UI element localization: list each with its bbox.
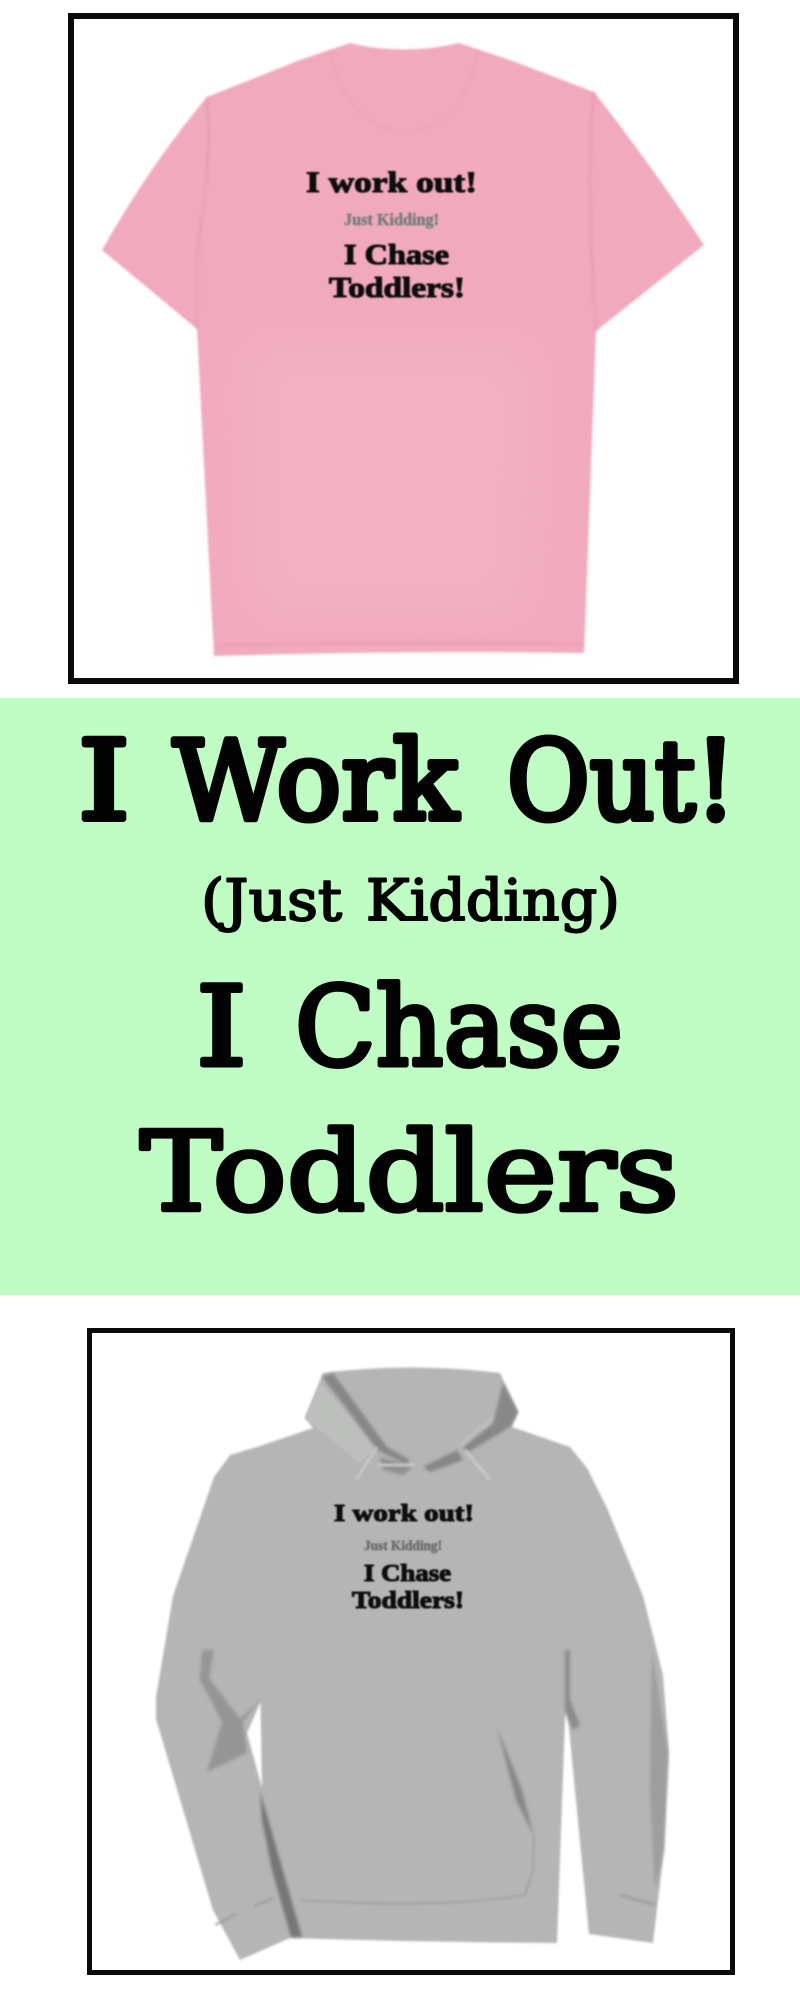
heading: I Chase: I <box>196 963 247 1091</box>
hoodie slogan: I Chase <box>364 1561 451 1587</box>
illustration: grey hoodie <box>156 1368 669 1960</box>
hood flaps <box>305 1383 510 1463</box>
heading: I Work Out! <box>78 717 736 845</box>
hoodie slogan: Just Kidding! <box>364 1539 442 1554</box>
heading: Toddlers: Toddlers <box>140 1108 679 1236</box>
gaps between sleeves and body <box>247 1702 262 1788</box>
subheading: Just Kidding: Kidding) <box>366 868 620 934</box>
pocket, waistband and cuff seams <box>215 1836 655 1925</box>
t-shirt slogan: I work out! <box>306 166 477 199</box>
hood and fabric shadows <box>200 1373 668 1937</box>
heading: I Work Out!: Work <box>173 717 459 845</box>
panel: green slogan banner <box>0 698 800 1295</box>
heading: I Work Out!: Out! <box>507 717 736 845</box>
drawstrings <box>356 1447 490 1480</box>
t-shirt slogan: I Chase <box>344 239 449 271</box>
t-shirt slogan: Toddlers! <box>329 272 465 304</box>
t-shirt slogan <box>306 166 477 304</box>
t-shirt slogan: Just Kidding! <box>344 210 439 229</box>
hoodie slogan: Toddlers! <box>352 1588 464 1614</box>
hoodie slogan: I work out! <box>334 1501 474 1527</box>
heading: I Work Out!: I <box>78 717 130 845</box>
subheading: Just Kidding: (Just <box>201 868 342 934</box>
hoodie slogan <box>334 1501 474 1614</box>
illustration: pink t-shirt <box>102 43 704 656</box>
hoodie silhouette <box>156 1368 669 1960</box>
subheading: Just Kidding <box>201 868 620 934</box>
panel: t-shirt product frame <box>71 16 736 681</box>
panel: hoodie product frame <box>90 1330 732 1972</box>
heading: I Chase: Chase <box>295 963 623 1091</box>
